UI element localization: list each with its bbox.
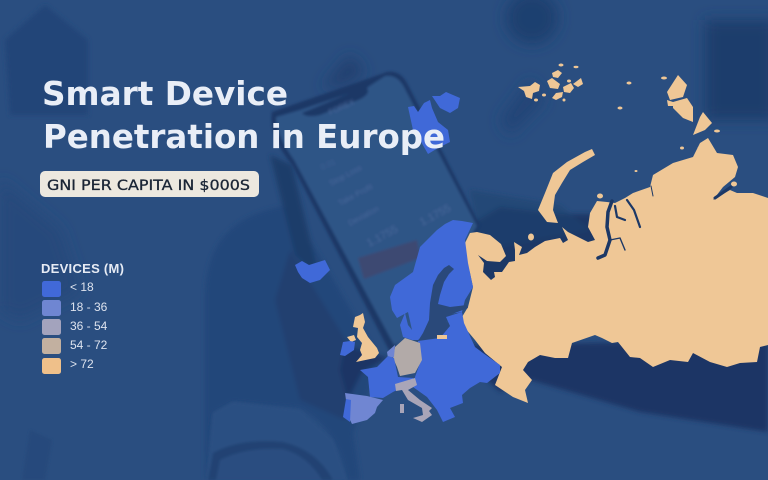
Sweden, Norway and Finland [390,220,473,340]
Svalbard [408,92,460,154]
Gulf of Bothnia and Baltic Sea [418,265,468,341]
France [360,356,417,398]
title: Smart Device [42,74,288,113]
phone body: Stop Loss [328,163,363,188]
Benelux [387,345,395,358]
phone body: Take Profit [337,182,375,208]
phone body: 1.1755 [418,202,453,229]
subtitle pill [40,171,259,197]
legend heading: DEVICES (M) [41,261,124,276]
Iceland [295,260,330,283]
Russian rivers and gulf inlets [598,186,731,258]
Ireland [340,341,355,356]
legend [41,261,124,374]
Portugal [343,399,351,422]
legend item: over 72: > 72 [70,357,94,371]
wristwatch band [22,402,347,480]
Franz Josef Land islands [518,82,540,99]
Germany [393,338,422,376]
legend item: 18-36: 18 - 36 [70,300,108,314]
Kaliningrad [437,335,447,339]
phone body: 1.1755 [365,223,400,250]
legend item: 54-72: 54 - 72 [70,338,108,352]
phone body [271,72,480,352]
title [42,74,445,156]
Italy [395,378,432,422]
phone body: FOREX [327,97,357,117]
legend item: 36-54: 36 - 54 [70,319,108,333]
Spain [345,393,383,424]
Eastern Europe and Baltics [413,312,500,422]
legend item: under 18: < 18 [70,280,94,294]
Russia (over 72M) [462,64,768,403]
phone body: 0.01 [319,157,338,172]
subtitle pill: GNI PER CAPITA IN $000S [47,178,250,194]
United Kingdom [347,313,379,362]
map of Europe [295,64,768,424]
phone body: Deviation [347,204,380,228]
title: Penetration in Europe [43,117,445,156]
